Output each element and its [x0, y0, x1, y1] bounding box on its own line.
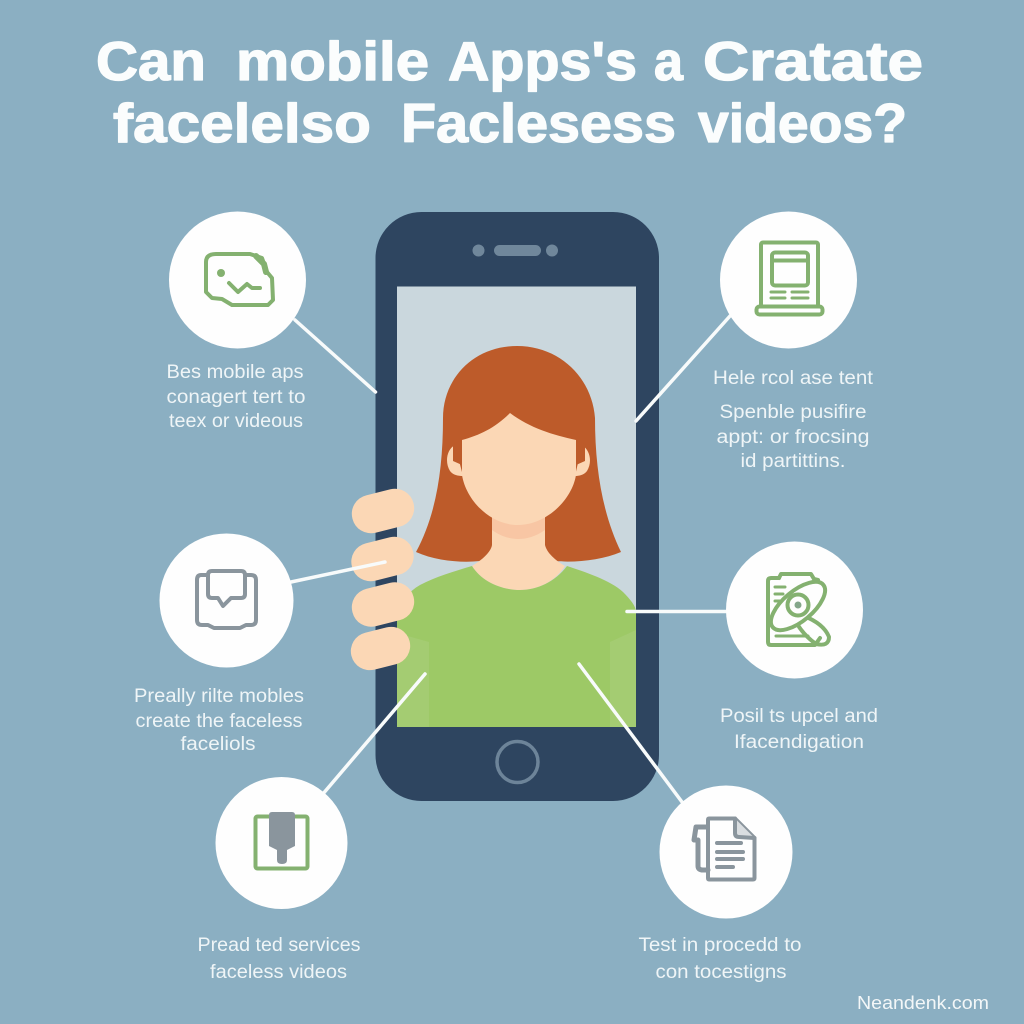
face [462, 413, 576, 525]
caption [166, 362, 306, 432]
connector 2 [636, 316, 730, 421]
title: facelelso [113, 92, 371, 154]
connector 1 [295, 320, 376, 392]
icon: document [694, 818, 754, 880]
title: mobile [236, 30, 429, 92]
caption [638, 935, 802, 983]
hair [416, 346, 621, 562]
icon: laptop document [756, 242, 822, 314]
hair side locks [453, 440, 585, 465]
finger 3 [348, 578, 418, 631]
circle badge [216, 777, 348, 909]
icon: chat tray [197, 571, 256, 628]
caption: con tocestigns [656, 962, 786, 983]
phone body [376, 212, 659, 801]
neck [472, 510, 565, 590]
home button [497, 742, 538, 782]
finger 1 [348, 485, 418, 537]
caption: Test in procedd to [638, 935, 802, 956]
shirt [397, 566, 636, 727]
caption [134, 686, 304, 755]
neck shadow [492, 518, 545, 539]
title: Apps's [448, 30, 637, 92]
circle badge [169, 212, 306, 348]
caption: faceless videos [210, 962, 347, 983]
panel: middle right feature [720, 542, 878, 753]
person illustration [397, 346, 636, 727]
hand fingers [347, 485, 418, 674]
phone screen [397, 286, 636, 727]
panel: bottom left feature [198, 777, 360, 983]
caption: Ifacendigation [734, 732, 864, 753]
title: Faclesess [401, 92, 676, 154]
title: Can [96, 30, 206, 92]
caption: Posil ts upcel and [720, 706, 878, 727]
caption: Preally rilte mobles [134, 686, 304, 707]
caption: Spenble pusifire [720, 402, 866, 423]
caption [720, 706, 878, 753]
title: a [654, 30, 683, 92]
panel: bottom right feature [638, 786, 802, 983]
caption: appt: or frocsing [716, 427, 870, 448]
caption: Hele rcol ase tent [713, 368, 874, 389]
icon: image message [206, 254, 273, 305]
connector 3 [291, 562, 385, 582]
finger 4 [347, 623, 414, 674]
connector 6 [579, 664, 682, 802]
title: Cratate [703, 30, 923, 92]
caption [198, 935, 360, 983]
phone speaker and camera [472, 244, 558, 256]
finger 2 [347, 533, 418, 585]
caption: Pread ted services [198, 935, 360, 956]
circle badge [160, 534, 294, 668]
phone [376, 212, 659, 801]
panel: top left feature [166, 212, 306, 432]
title [96, 30, 923, 154]
connector lines [291, 316, 730, 802]
caption: faceliols [180, 734, 256, 755]
caption [713, 368, 874, 472]
icon: plug in frame [256, 812, 308, 868]
sleeves [397, 630, 636, 727]
connector 4 [627, 610, 726, 613]
caption: id partittins. [740, 451, 846, 472]
watermark: Neandenk.com [857, 993, 989, 1013]
panel: middle left feature [134, 534, 304, 755]
title: videos? [698, 92, 907, 154]
circle badge [726, 542, 863, 678]
connector 5 [322, 674, 425, 795]
circle badge [720, 212, 857, 348]
panel: top right feature [713, 212, 874, 472]
circle badge [660, 786, 792, 918]
caption: conagert tert to [166, 387, 306, 408]
caption: create the faceless [136, 711, 302, 732]
icon: clipboard with fan [763, 573, 833, 645]
caption: teex or videous [169, 411, 303, 432]
ears [447, 445, 590, 476]
caption: Bes mobile aps [166, 362, 304, 383]
